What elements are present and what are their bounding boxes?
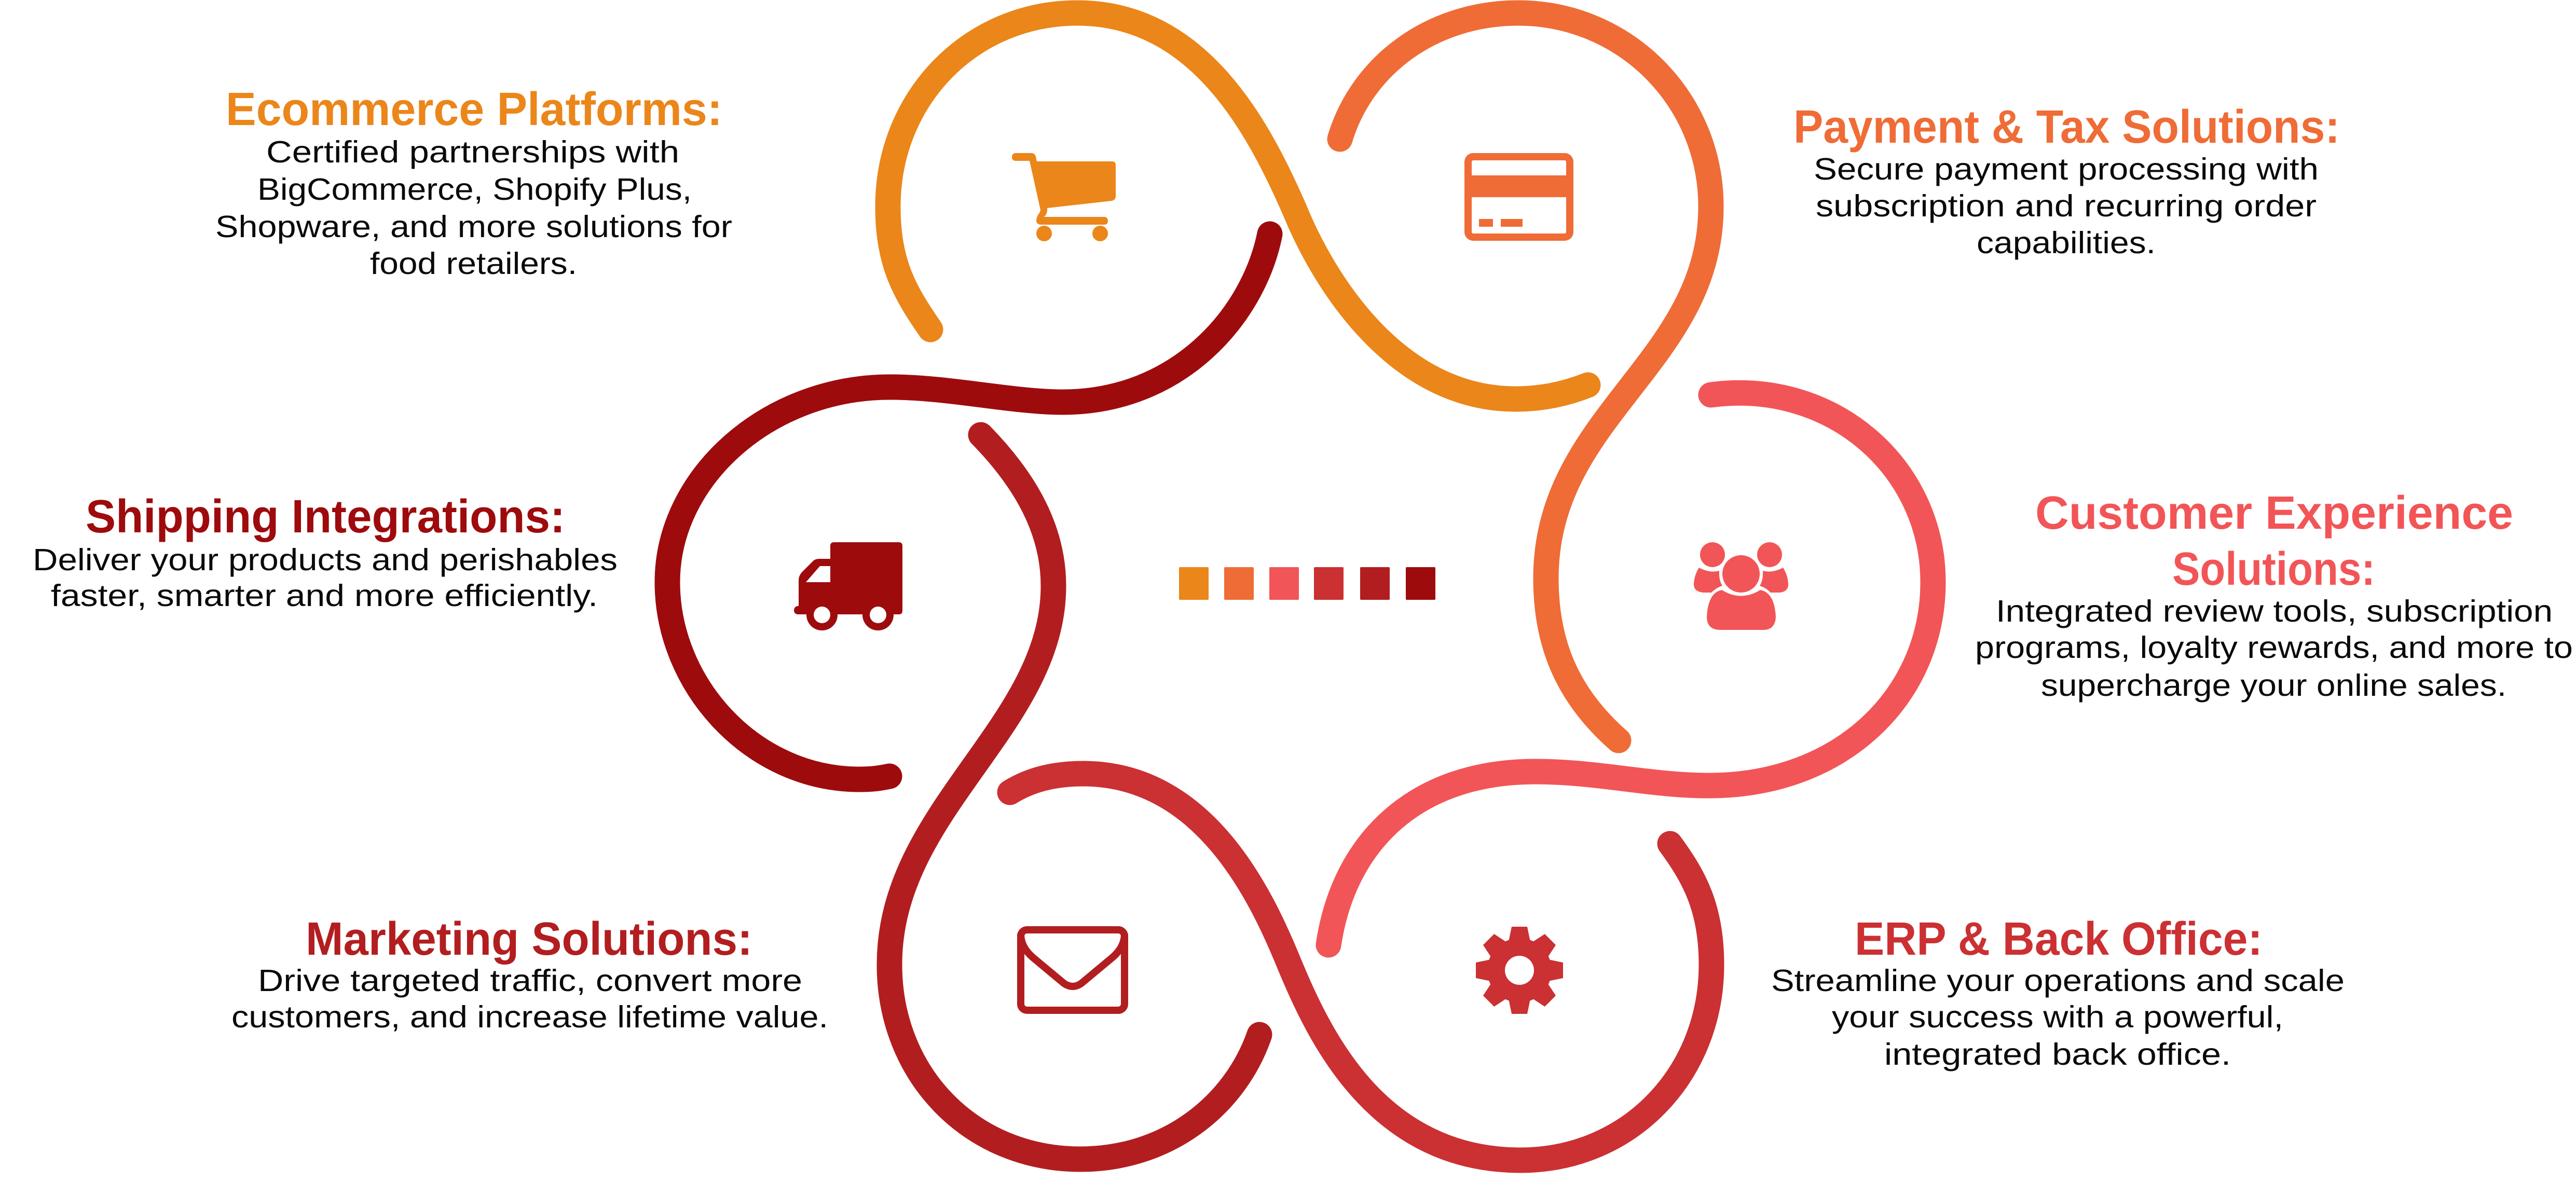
description: ERP and back office [1771, 964, 2345, 1071]
text block: ERP and back office [1771, 913, 2345, 1071]
text block: payment and tax solutions [1793, 101, 2340, 260]
heading: ecommerce platforms: Ecommerce Platforms: [226, 84, 722, 135]
description: shipping integrations: faster, smarter and more efficiently. [51, 579, 598, 613]
heading: marketing solutions: Marketing Solutions: [306, 913, 752, 965]
text block: ecommerce platforms [215, 84, 732, 281]
description: ecommerce platforms: Shopware, and more solutions for [215, 210, 732, 244]
description: marketing solutions: customers, and increase lifetime value. [231, 1000, 828, 1034]
description: marketing solutions [231, 964, 828, 1034]
description: ERP and back office: integrated back office. [1884, 1037, 2231, 1071]
heading: payment and tax solutions: Payment & Tax Solutions: [1793, 101, 2340, 153]
heading: ERP and back office: ERP & Back Office: [1855, 913, 2263, 965]
icon: envelope [1021, 930, 1125, 1010]
icon: credit card [1468, 157, 1570, 237]
description: payment and tax solutions [1814, 152, 2319, 260]
icon: delivery truck [794, 542, 902, 630]
description: customer experience solutions [1975, 594, 2573, 703]
description: ecommerce platforms: BigCommerce, Shopify Plus, [257, 172, 692, 207]
description: shipping integrations: Deliver your products and perishables [33, 543, 618, 577]
description: customer experience solutions: Integrated review tools, subscription [1996, 594, 2553, 628]
heading: customer experience solutions: Customer Experience [2035, 487, 2513, 539]
description: shipping integrations [33, 543, 618, 613]
icon: shopping cart [1012, 153, 1116, 241]
icon: customers group [1694, 542, 1788, 630]
description: payment and tax solutions: capabilities. [1977, 226, 2156, 260]
description: ERP and back office: Streamline your operations and scale [1771, 964, 2345, 998]
text block: customer experience solutions [1975, 487, 2573, 703]
icon: gear [1476, 927, 1563, 1014]
description: payment and tax solutions: subscription and recurring order [1816, 189, 2317, 223]
curve: marketing loop [889, 435, 1259, 1159]
text block: marketing solutions [231, 913, 828, 1034]
description: ecommerce platforms [215, 135, 732, 281]
heading: customer experience solutions: Solutions: [2172, 543, 2375, 595]
curve: customer experience loop [1328, 393, 1933, 945]
curve: ERP loop [1010, 774, 1711, 1160]
center colour squares [1179, 567, 1435, 600]
heading: customer experience solutions [2035, 487, 2513, 595]
curve: ecommerce loop [888, 13, 1588, 399]
description: ERP and back office: your success with a powerful, [1832, 1000, 2283, 1034]
description: ecommerce platforms: Certified partnerships with [266, 135, 679, 169]
heading: shipping integrations: Shipping Integrations: [86, 491, 565, 543]
curve: shipping loop [667, 234, 1270, 779]
description: customer experience solutions: supercharge your online sales. [2041, 668, 2506, 703]
description: ecommerce platforms: food retailers. [370, 246, 577, 281]
curve: payment loop [1340, 13, 1711, 740]
description: marketing solutions: Drive targeted traffic, convert more [258, 964, 802, 998]
description: payment and tax solutions: Secure payment processing with [1814, 152, 2319, 186]
text block: shipping integrations [33, 491, 618, 613]
description: customer experience solutions: programs, loyalty rewards, and more to [1975, 630, 2573, 665]
